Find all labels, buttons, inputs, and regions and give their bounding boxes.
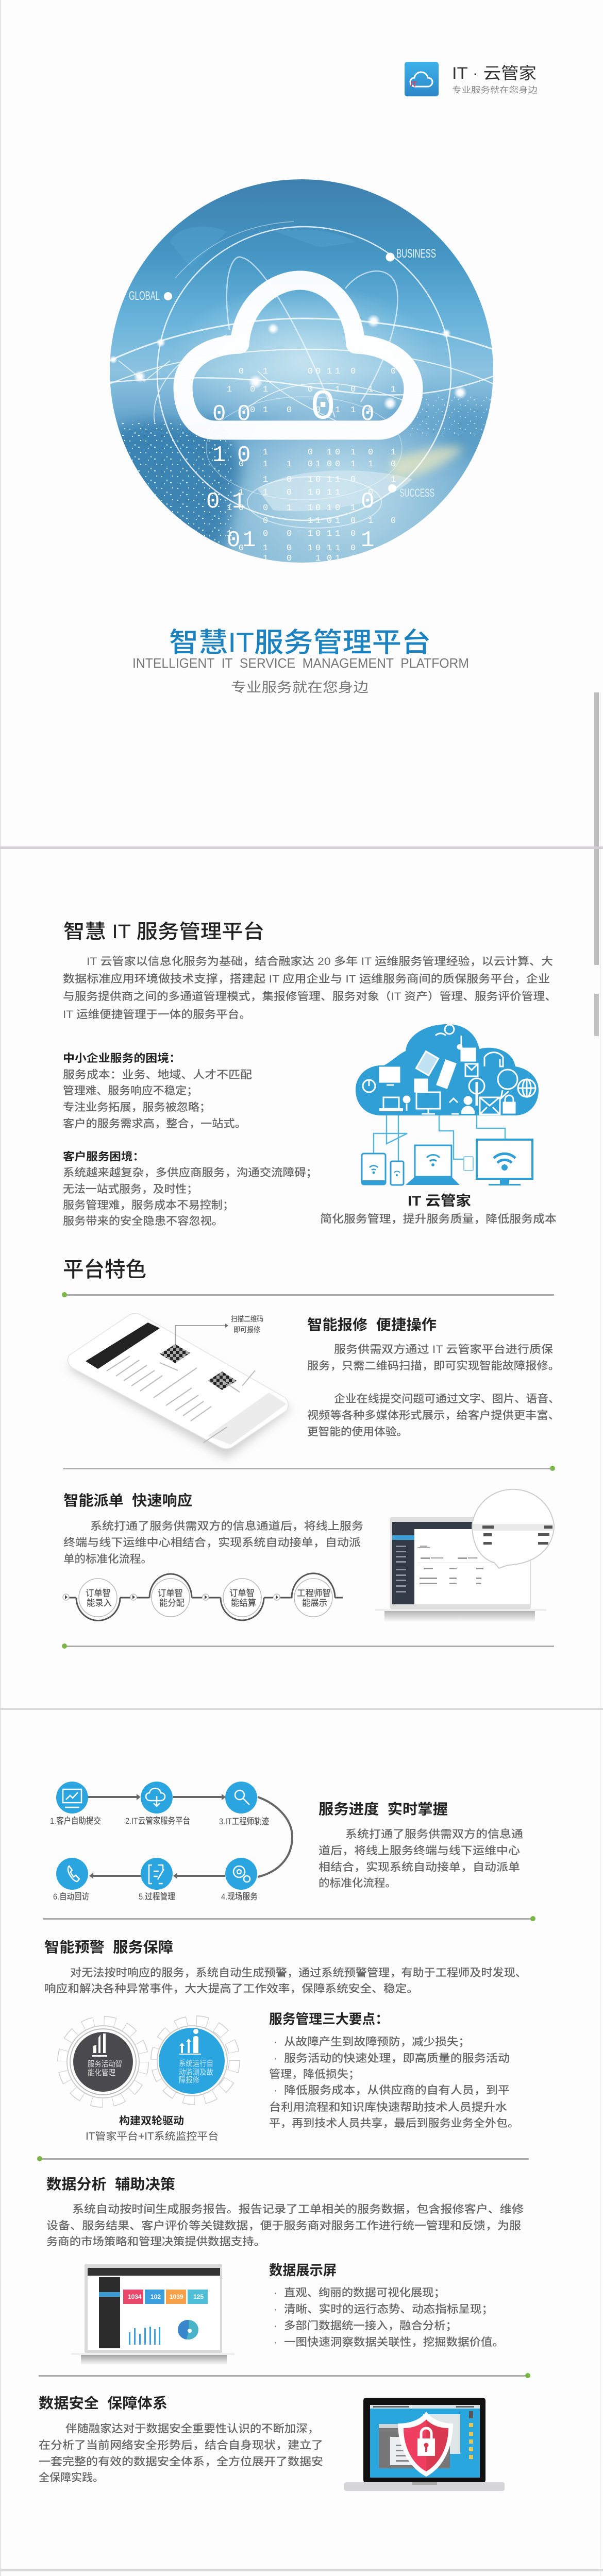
binary digits: 11010110 xyxy=(239,488,373,498)
feature: data security: 一套完整的有效的数据安全体系，全方位展开了数据安 xyxy=(39,2456,323,2468)
text block: three key points: · xyxy=(274,2084,277,2096)
feature: smart dispatch: 单的标准化流程。 xyxy=(63,1553,152,1565)
glow dots xyxy=(109,314,467,410)
binary digits: 01101010 xyxy=(263,516,396,526)
feature: data analysis: 系统自动按时间生成服务报告。报告记录了工单相关的服务数据，包含报修客户、维修 xyxy=(72,2204,524,2215)
flow: order process: 订单智 xyxy=(86,1588,111,1598)
feature: data analysis: 务商的市场策略和管理决策提供数据支持。 xyxy=(46,2236,265,2248)
illustration: dashboard laptop: 102 xyxy=(150,2293,161,2300)
flow: order process: 能分配 xyxy=(159,1598,185,1608)
feature: smart alert: 智能预警 服务保障 xyxy=(44,1939,173,1955)
callout: scan QR code xyxy=(175,1315,263,1344)
text block: SME difficulties: 专注业务拓展，服务被忽略； xyxy=(63,1101,211,1113)
hero circle image: BUSINESS xyxy=(396,247,436,261)
intro paragraph xyxy=(63,956,557,1021)
feature: smart repair: 视频等各种多媒体形式展示，给客户提供更丰富、 xyxy=(307,1410,560,1421)
flow: service progress: 2.IT云管家服务平台 xyxy=(125,1816,190,1826)
hero labels: GLOBAL xyxy=(129,289,160,303)
feature: smart repair: 智能报修 便捷操作 xyxy=(307,1317,437,1333)
text block: data display: 直观、绚丽的数据可视化展现； xyxy=(284,2287,445,2299)
right gear: 系统运行自 xyxy=(179,2059,213,2068)
binary digits xyxy=(227,367,396,564)
icon: laptop xyxy=(406,1145,460,1185)
network lines xyxy=(110,222,493,528)
feature: smart alert: 响应和解决各种异常事件，大大提高了工作效率，保障系统安全、稳定。 xyxy=(44,1983,418,1995)
feature: data security xyxy=(39,2395,323,2484)
cloud caption: IT 云管家 xyxy=(408,1193,471,1209)
text block: SME difficulties: 服务成本：业务、地域、人才不匹配 xyxy=(63,1069,252,1081)
icon: tablet xyxy=(362,1154,386,1184)
intro paragraph: IT 运维便捷管理于一体的服务平台。 xyxy=(63,1009,251,1021)
feature: smart dispatch: 终端与线下运维中心相结合，实现系统自动接单，自动派 xyxy=(63,1537,361,1549)
feature: data security: 数据安全 保障体系 xyxy=(39,2395,167,2411)
text block: three key points: · xyxy=(274,2036,277,2048)
text block: data display: · xyxy=(274,2336,277,2348)
text block: customer difficulties: 服务管理难，服务成本不易控制； xyxy=(63,1199,234,1211)
hero circle image: 010 xyxy=(206,489,374,515)
binary digits: 10101101 xyxy=(263,475,396,485)
right gear: 动监测及故 xyxy=(179,2068,213,2077)
text block: data display: 多部门数据统一接入，融合分析； xyxy=(284,2320,457,2332)
binary digits: 100110101 xyxy=(227,503,356,513)
flow: service progress xyxy=(50,1782,292,1902)
flow: order process: 能录入 xyxy=(87,1598,112,1608)
text block: customer difficulties xyxy=(63,1150,317,1227)
phone text lines xyxy=(107,1356,255,1443)
flow icons xyxy=(63,1788,250,1884)
feature: data analysis: 设备、服务结果、客户评价等关键数据，便于服务商对服务工作进行统一管理和反馈，为服 xyxy=(46,2220,521,2232)
text block: customer difficulties: 无法一站式服务，及时性； xyxy=(63,1183,198,1195)
feature: smart repair: 服务供需双方通过 IT 云管家平台进行质保 xyxy=(334,1344,553,1355)
text block: customer difficulties: 客户服务困境： xyxy=(63,1150,144,1163)
feature: smart dispatch xyxy=(63,1493,363,1565)
cloud inner icons xyxy=(363,1025,535,1114)
logo xyxy=(405,62,538,96)
illustration: phone with QR codes xyxy=(67,1314,291,1458)
text block: SME difficulties: 中小企业服务的困境： xyxy=(63,1052,181,1064)
icon: small device xyxy=(464,1157,473,1171)
feature: data analysis: 数据分析 辅助决策 xyxy=(46,2176,175,2192)
feature: smart repair: 服务，只需二维码扫描，即可实现智能故障报修。 xyxy=(307,1360,560,1372)
illustration: dashboard laptop: 1034 xyxy=(128,2293,142,2300)
feature: data analysis xyxy=(46,2176,524,2248)
icon: logo cloud xyxy=(405,62,439,96)
binary digits: 10101011 xyxy=(227,385,396,395)
divider xyxy=(62,1643,554,1649)
feature: data security: 全保障实践。 xyxy=(39,2472,104,2484)
flow: order process: 工程师智 xyxy=(297,1588,331,1598)
heading: platform intro: 智慧 IT 服务管理平台 xyxy=(63,921,264,943)
text block: SME difficulties: 管理难、服务响应不稳定； xyxy=(63,1085,198,1097)
flow: service progress: 4.现场服务 xyxy=(221,1892,258,1902)
divider xyxy=(37,2156,529,2161)
flow: order process: 能结算 xyxy=(231,1598,256,1608)
tagline: 专业服务就在您身边 xyxy=(231,680,368,695)
intro paragraph: 与服务提供商之间的多通道管理模式，集报修管理、服务对象（IT 资产）管理、服务评价管理、 xyxy=(63,991,557,1003)
illustration: laptop with magnified callout xyxy=(375,1489,554,1622)
hero circle image xyxy=(109,178,493,577)
hero circle image: 000 xyxy=(212,401,374,427)
text block: three key points: 台利用流程和知识库快速帮助技术人员提升水 xyxy=(269,2102,507,2113)
binary digits: 01001100 xyxy=(239,367,396,377)
feature: service progress: 的标准化流程。 xyxy=(319,1877,396,1889)
flow: service progress: 6.自动回访 xyxy=(53,1892,89,1902)
phone header xyxy=(86,1323,160,1369)
feature: smart dispatch: 系统打通了服务供需双方的信息通道后，将线上服务 xyxy=(90,1520,363,1532)
callout: scan QR code: 即可报修 xyxy=(233,1326,260,1334)
text block: data display xyxy=(269,2263,504,2348)
text block: customer difficulties: 系统越来越复杂，多供应商服务，沟通交流障碍； xyxy=(63,1167,317,1179)
icon: phone xyxy=(391,1161,404,1185)
text block: three key points: 平，再到技术人员共享，最后到服务业务全外包。 xyxy=(269,2117,519,2129)
hero cloud outline xyxy=(183,280,413,430)
text block: data display: 数据展示屏 xyxy=(269,2263,337,2278)
right gear xyxy=(156,2021,234,2099)
binary digits: 10010110 xyxy=(227,529,356,539)
binary digits: 1010101 xyxy=(263,448,396,457)
divider xyxy=(63,1466,555,1471)
main title: 智慧IT服务管理平台 xyxy=(169,628,431,658)
icon: red shield with lock xyxy=(398,2412,453,2477)
feature: service progress: 道后，将线上服务终端与线下运维中心 xyxy=(319,1845,520,1857)
icon: monitor xyxy=(477,1140,532,1185)
flow: order process: 订单智 xyxy=(158,1588,183,1598)
gear caption xyxy=(86,2115,219,2142)
intro paragraph: 数据标准应用环境做技术支撑，搭建起 IT 应用企业与 IT 运维服务商间的质保服务平台，企业 xyxy=(63,973,550,985)
callout: scan QR code: 扫描二维码 xyxy=(231,1315,263,1323)
hero circle image: 0 xyxy=(310,383,336,431)
feature: smart alert xyxy=(44,1939,527,1995)
logo tagline: 专业服务就在您身边 xyxy=(452,86,538,95)
flow: order process: 能展示 xyxy=(302,1598,327,1608)
divider xyxy=(43,1916,535,1921)
hero circle image: 011 xyxy=(227,528,374,553)
text block: data display: 清晰、实时的运行态势、动态指标呈现； xyxy=(284,2303,493,2315)
icon: blue cloud xyxy=(356,1024,539,1115)
divider xyxy=(62,1292,554,1297)
text block: SME difficulties xyxy=(63,1052,252,1130)
logo name: IT · 云管家 xyxy=(452,64,537,82)
left gear xyxy=(63,2022,143,2102)
text block: three key points: 降低服务成本，从供应商的自有人员，到平 xyxy=(284,2084,510,2096)
feature: smart alert: 对无法按时响应的服务，系统自动生成预警，通过系统预警管理，有助于工程师及时发现、 xyxy=(70,1967,527,1979)
cloud description: 简化服务管理，提升服务质量，降低服务成本 xyxy=(320,1213,557,1225)
text block: data display: 一图快速洞察数据关联性，挖掘数据价值。 xyxy=(284,2336,504,2348)
illustration: dashboard laptop xyxy=(71,2264,234,2365)
illustration: dashboard laptop: 1039 xyxy=(170,2293,183,2300)
feature: data security: 伴随融家达对于数据安全重要性认识的不断加深， xyxy=(65,2423,319,2435)
flow: order process: 订单智 xyxy=(229,1588,255,1598)
connector lines xyxy=(374,1115,505,1161)
phone QR codes xyxy=(160,1344,237,1390)
feature: service progress: 相结合，实现系统自动接单，自动派单 xyxy=(319,1861,520,1873)
feature: smart repair: 企业在线提交问题可通过文字、图片、语音、 xyxy=(334,1393,560,1405)
text block: three key points: 服务活动的快速处理，即高质量的服务活动 xyxy=(284,2053,510,2064)
flow: service progress: 3.IT工程师轨迹 xyxy=(219,1817,269,1826)
binary digits: 010101101 xyxy=(239,544,396,553)
feature: service progress: 服务进度 实时掌握 xyxy=(319,1801,448,1817)
feature: smart dispatch: 智能派单 快速响应 xyxy=(63,1493,192,1509)
feature: data security: 在分析了当前网络安全形势后，结合自身现状，建立了 xyxy=(39,2439,323,2451)
gear caption: 构建双轮驱动 xyxy=(119,2115,184,2127)
callout bubble xyxy=(472,1489,554,1568)
heading: platform features: 平台特色 xyxy=(63,1258,146,1281)
english subtitle: INTELLIGENT IT SERVICE MANAGEMENT PLATFORM xyxy=(132,655,469,671)
binary digits: 0110100110 xyxy=(239,460,396,469)
right gear: 障报修 xyxy=(179,2075,199,2084)
text block: three key points: 管理，降低损失； xyxy=(269,2069,360,2080)
flow: order process xyxy=(63,1573,343,1621)
hero circle image: 10 xyxy=(212,443,250,468)
illustration: cloud connected devices xyxy=(356,1024,539,1185)
flow: service progress: 5.过程管理 xyxy=(139,1892,175,1902)
feature: smart repair xyxy=(307,1317,560,1438)
text block: three key points: · xyxy=(274,2053,277,2064)
text block: data display: · xyxy=(274,2287,277,2299)
gear caption: IT管家平台+IT系统监控平台 xyxy=(86,2130,219,2142)
feature: service progress: 系统打通了服务供需双方的信息通 xyxy=(345,1828,523,1840)
binary digits: 101011 xyxy=(263,554,356,564)
feature: smart repair: 更智能的使用体验。 xyxy=(307,1426,408,1438)
illustration: dual gears xyxy=(63,2021,234,2142)
illustration: dashboard laptop: 125 xyxy=(193,2293,204,2300)
text block: SME difficulties: 客户的服务需求高，整合，一站式。 xyxy=(63,1118,246,1130)
intro paragraph: IT 云管家以信息化服务为基础，结合融家达 20 多年 IT 运维服务管理经验，以云计算、大 xyxy=(87,956,553,968)
text block: customer difficulties: 服务带来的安全隐患不容忽视。 xyxy=(63,1215,223,1227)
text block: data display: · xyxy=(274,2320,277,2332)
illustration: security laptop xyxy=(344,2398,505,2491)
binary digits: 0100110 xyxy=(250,405,373,415)
icon: logo cloud: IT xyxy=(410,80,417,89)
left gear: 服务活动智 xyxy=(88,2059,122,2069)
hero circle image: SUCCESS xyxy=(399,486,434,499)
text block: data display: · xyxy=(274,2303,277,2315)
feature: service progress xyxy=(319,1801,523,1889)
text block: three key points: 服务管理三大要点： xyxy=(269,2011,389,2027)
text block: three key points xyxy=(269,2011,519,2129)
left gear: 能化管理 xyxy=(88,2069,115,2077)
divider xyxy=(39,2373,530,2378)
flow: service progress: 1.客户自助提交 xyxy=(50,1816,101,1826)
text block: three key points: 从故障产生到故障预防，减少损失； xyxy=(284,2036,470,2048)
